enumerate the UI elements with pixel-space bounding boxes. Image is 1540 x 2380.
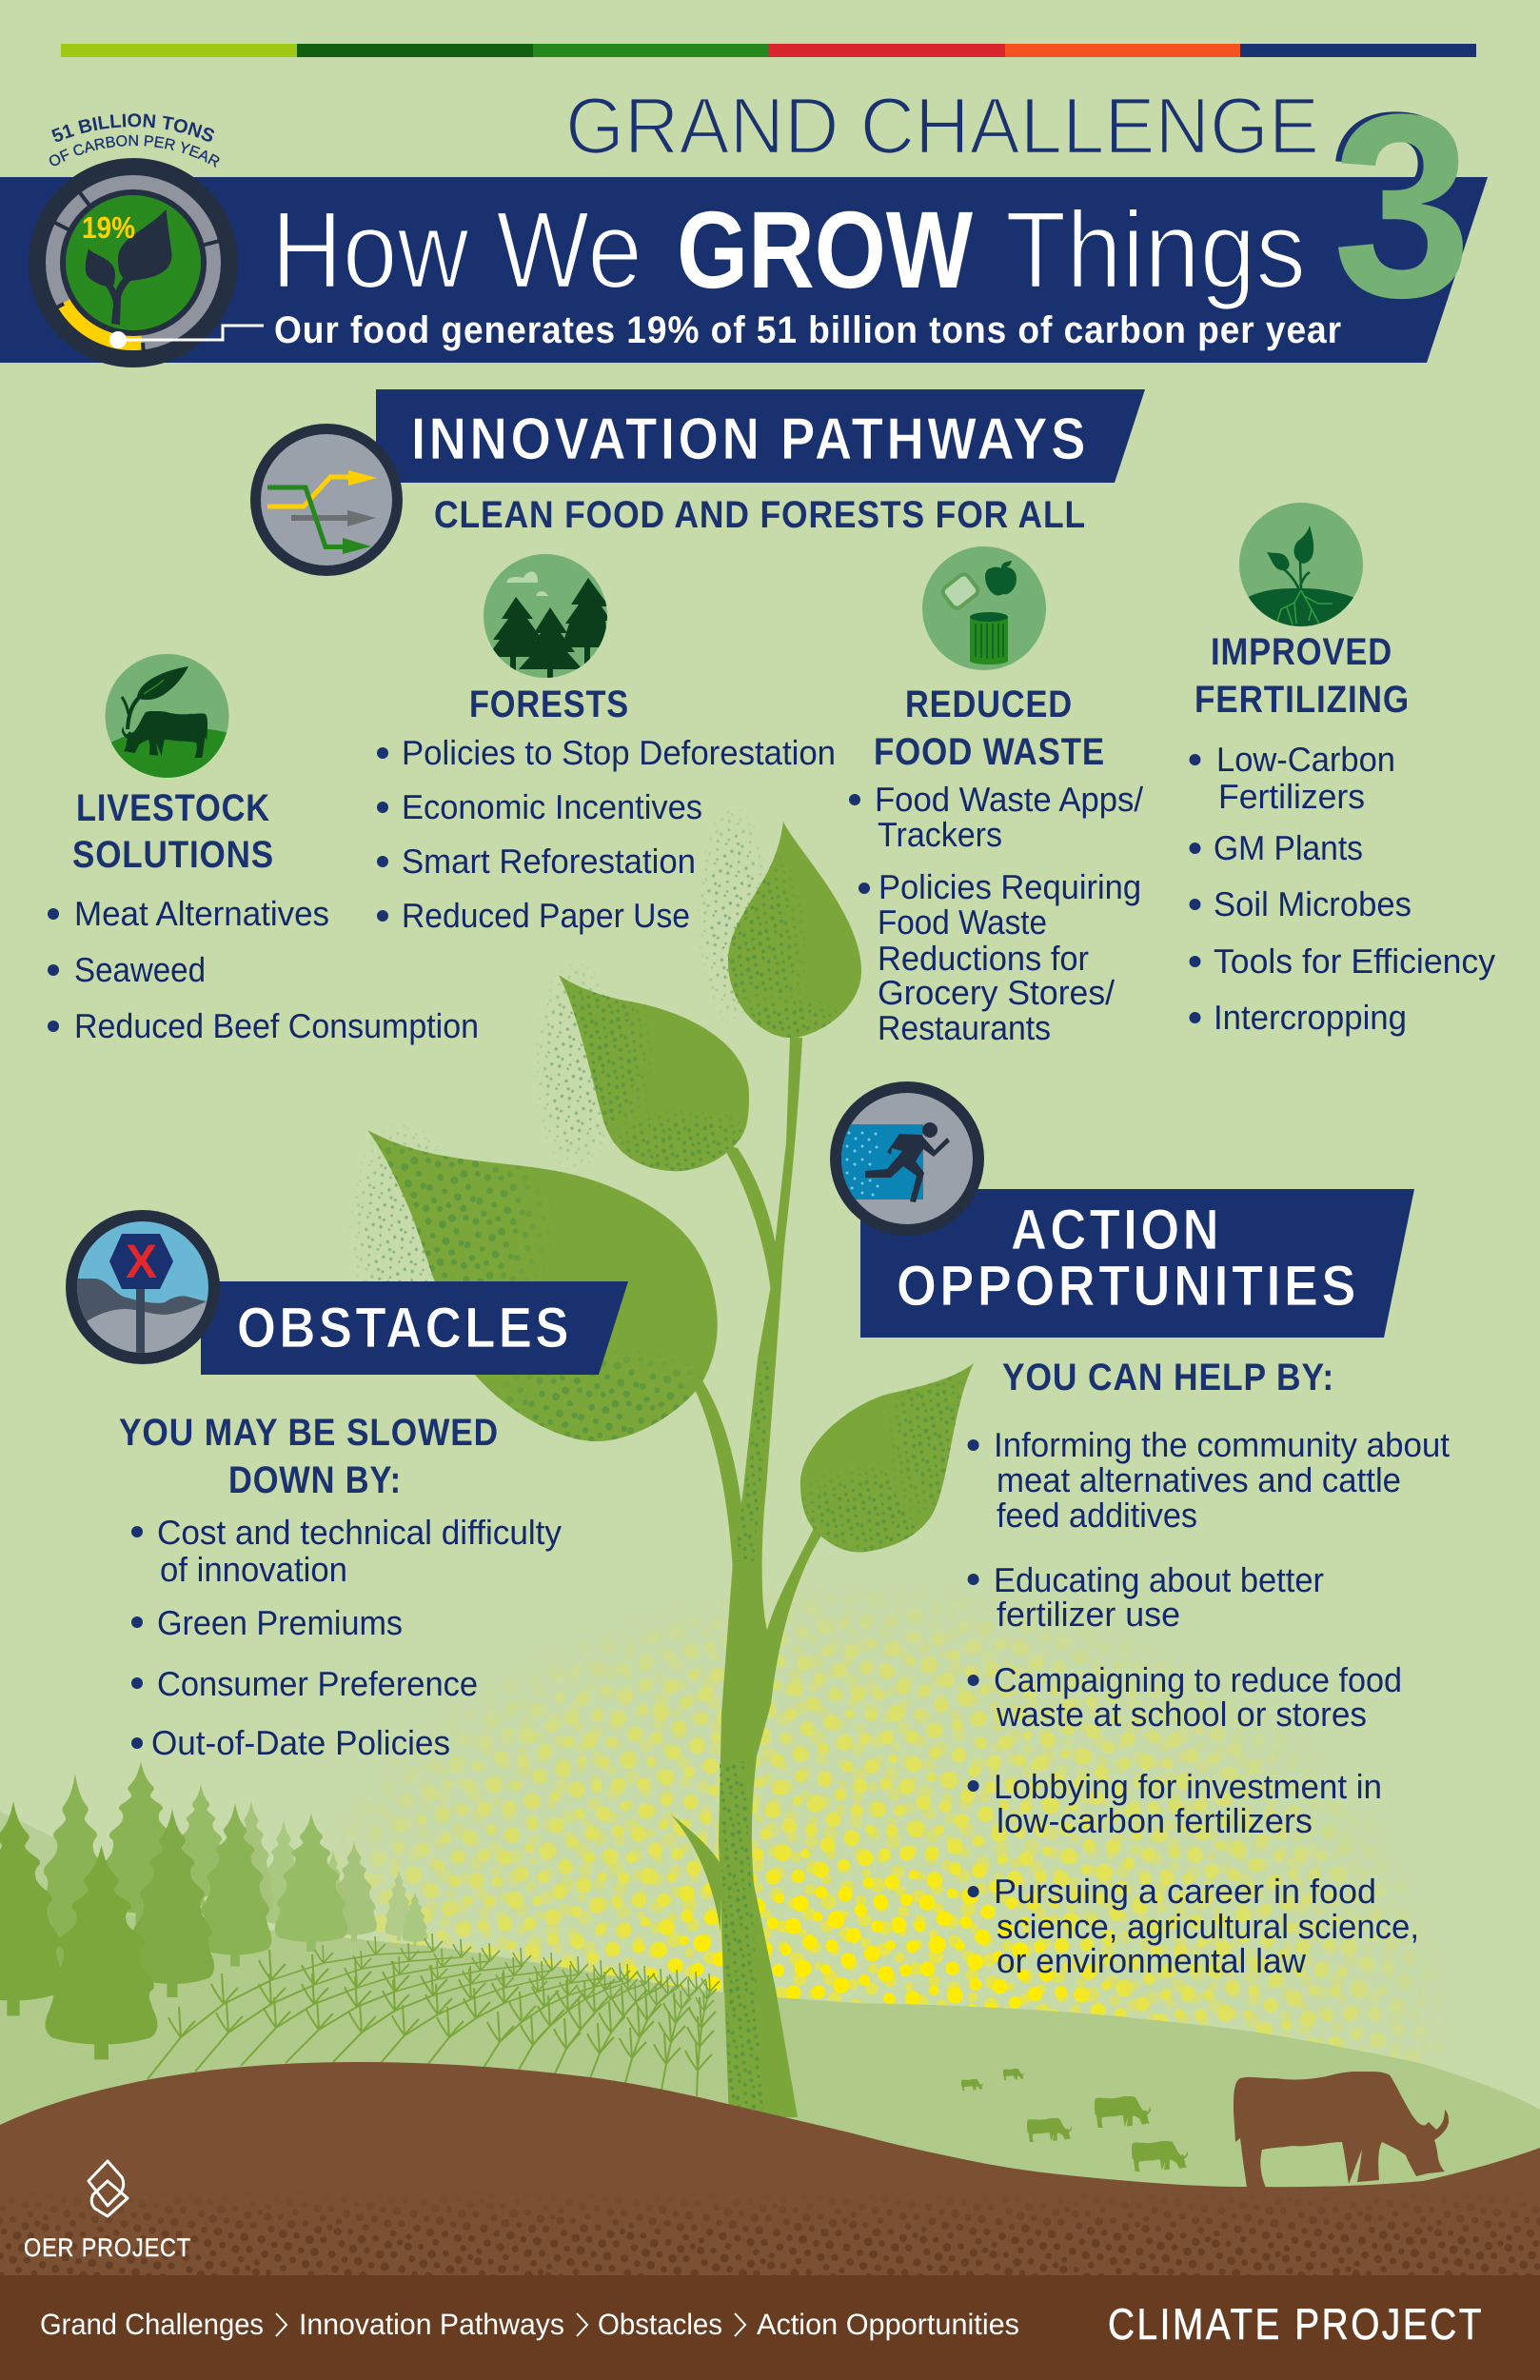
curved gauge caption xyxy=(49,113,219,168)
stem xyxy=(719,1038,823,2117)
icon: cow and leaf xyxy=(105,654,228,778)
obstacles banner xyxy=(201,1281,628,1375)
bullet list: of innovation xyxy=(160,1550,347,1589)
bullet list: science, agricultural science, xyxy=(997,1907,1419,1946)
panel: improved fertilizing: FERTILIZING xyxy=(1194,679,1410,721)
heading: REDUCED xyxy=(905,684,1073,725)
bullet list: or environmental law xyxy=(997,1941,1307,1980)
bullet list xyxy=(968,1425,1450,1980)
bullet list: Out-of-Date Policies xyxy=(151,1723,450,1762)
green disk xyxy=(66,195,201,330)
thin side leaf xyxy=(671,1815,721,1933)
second leaf xyxy=(559,975,749,1171)
bullet list: Pursuing a career in food xyxy=(994,1872,1376,1911)
icon: pathways arrows xyxy=(250,424,403,576)
bullet list: Soil Microbes xyxy=(1214,884,1412,923)
main title xyxy=(271,189,1306,311)
bullet list: waste at school or stores xyxy=(996,1695,1367,1734)
innovation pathways banner: INNOVATION PATHWAYS xyxy=(411,407,1089,472)
logo text: OER PROJECT xyxy=(24,2233,191,2262)
heading: FORESTS xyxy=(469,684,629,725)
footer navigation: Innovation Pathways xyxy=(299,2308,564,2341)
panel: forests xyxy=(377,554,836,935)
main title: Things xyxy=(1005,189,1306,311)
bullet list: Smart Reforestation xyxy=(402,842,696,881)
icon: interlocked diamonds xyxy=(89,2161,128,2216)
bullet list: Reduced Paper Use xyxy=(402,896,690,935)
action banner xyxy=(860,1189,1414,1338)
bullet list: Food Waste Apps/ xyxy=(875,780,1143,819)
plant xyxy=(343,800,990,2123)
icon: food and bin xyxy=(922,546,1046,670)
pathways subtitle: CLEAN FOOD AND FORESTS FOR ALL xyxy=(434,494,1086,536)
main title: How We xyxy=(271,189,642,311)
branch: large leaf xyxy=(693,1380,747,1571)
subtitle: Our food generates 19% of 51 billion tons of carbon per year xyxy=(274,309,1342,351)
bullet list: Reductions for xyxy=(878,939,1089,978)
icon: road sign: X xyxy=(126,1235,157,1288)
background hill xyxy=(0,1812,286,1999)
bullet list: Reduced Beef Consumption xyxy=(74,1006,479,1045)
panel: improved fertilizing xyxy=(1190,503,1495,1037)
innovation pathways banner xyxy=(376,389,1145,483)
bullet list: Food Waste xyxy=(878,902,1047,942)
bullet list: Consumer Preference xyxy=(157,1664,478,1703)
panel: reduced food waste: FOOD WASTE xyxy=(874,731,1105,773)
panel: reduced food waste xyxy=(849,546,1143,1047)
crop rows xyxy=(148,1952,710,2096)
bullet list: Educating about better xyxy=(994,1560,1324,1599)
bullet list: feed additives xyxy=(997,1496,1197,1535)
OER Project logo xyxy=(24,2161,191,2262)
yellow dot field xyxy=(328,1594,1439,2068)
connector line xyxy=(118,326,264,340)
bullet list xyxy=(849,780,1143,1047)
bullet list: Tools for Efficiency xyxy=(1214,942,1495,981)
panel: obstacles: DOWN BY: xyxy=(228,1459,402,1501)
bullet list: meat alternatives and cattle xyxy=(997,1460,1401,1499)
numeral 3: 3 xyxy=(1327,58,1466,349)
panel: livestock solutions xyxy=(48,654,479,1045)
heading: YOU CAN HELP BY: xyxy=(1002,1357,1334,1398)
bullet list: Informing the community about xyxy=(994,1425,1450,1464)
bullet list: Meat Alternatives xyxy=(74,894,329,933)
bullet list xyxy=(1190,740,1495,1037)
bullet list: Restaurants xyxy=(878,1008,1051,1047)
heading: YOU MAY BE SLOWED xyxy=(119,1412,499,1454)
curved gauge caption: OF CARBON PER YEAR xyxy=(49,135,219,168)
curved gauge caption: 51 BILLION TONS xyxy=(51,113,214,142)
forest xyxy=(0,1761,427,2059)
bullet list: Policies Requiring xyxy=(879,867,1141,906)
bullet list: Seaweed xyxy=(74,950,206,989)
bullet list: Lobbying for investment in xyxy=(994,1767,1382,1806)
icon: road sign xyxy=(66,1210,220,1364)
carbon gauge xyxy=(29,158,264,367)
panel: livestock solutions: SOLUTIONS xyxy=(72,834,274,876)
bullet list: Trackers xyxy=(878,815,1002,854)
footer navigation: Grand Challenges xyxy=(40,2308,264,2341)
bullet list xyxy=(131,1513,562,1762)
colour stripe xyxy=(61,44,1476,57)
footer navigation: Action Opportunities xyxy=(757,2308,1019,2341)
stem base speckle xyxy=(725,1990,763,2110)
bullet list: low-carbon fertilizers xyxy=(997,1801,1313,1840)
soil xyxy=(0,2062,1540,2285)
panel: action opportunities xyxy=(830,1081,1450,1980)
bullet list: Low-Carbon xyxy=(1216,740,1395,779)
bullet list: fertilizer use xyxy=(997,1595,1180,1634)
action banner: OPPORTUNITIES xyxy=(897,1254,1359,1318)
bullet list: Policies to Stop Deforestation xyxy=(402,733,836,772)
action banner: ACTION xyxy=(1011,1198,1222,1261)
main title: GROW xyxy=(677,189,973,311)
bullet list: Grocery Stores/ xyxy=(878,973,1115,1012)
icon: plant xyxy=(86,209,172,325)
bullet list: Green Premiums xyxy=(157,1603,403,1642)
bullet list: Cost and technical difficulty xyxy=(157,1513,562,1552)
gauge percentage: 19% xyxy=(82,210,135,245)
footer navigation: Obstacles xyxy=(598,2308,722,2341)
grazing cow xyxy=(1234,2072,1449,2188)
numeral 3: 3 xyxy=(1333,60,1471,351)
bullet list xyxy=(48,894,479,1045)
panel: obstacles xyxy=(66,1210,628,1762)
title banner xyxy=(0,177,1488,363)
title: grand challenge: GRAND CHALLENGE xyxy=(565,81,1319,170)
right leaf xyxy=(800,1363,974,1552)
bullet list: Economic Incentives xyxy=(402,787,702,826)
heading: IMPROVED xyxy=(1211,631,1392,673)
stem base over field xyxy=(724,1990,798,2117)
icon: seedling and roots xyxy=(1239,503,1363,626)
branch: second leaf xyxy=(727,1145,781,1293)
bullet list: GM Plants xyxy=(1214,828,1363,867)
field xyxy=(0,1904,1540,2190)
small grazing cows xyxy=(961,2069,1188,2172)
footer band xyxy=(0,2275,1540,2380)
bullet list: Intercropping xyxy=(1214,998,1407,1037)
stem speckle xyxy=(720,1361,769,1985)
top leaf xyxy=(728,822,861,1038)
icon: running figure xyxy=(830,1081,984,1236)
obstacles banner: OBSTACLES xyxy=(237,1296,572,1359)
leaf overspray dots xyxy=(350,809,762,1281)
large leaf xyxy=(367,1130,718,1441)
bullet list xyxy=(377,733,836,935)
icon: pine trees xyxy=(484,554,611,678)
bullet list: Fertilizers xyxy=(1218,777,1365,816)
bullet list: Campaigning to reduce food xyxy=(994,1660,1402,1699)
footer navigation xyxy=(40,2308,1019,2341)
heading: LIVESTOCK xyxy=(76,787,270,829)
soil speckle xyxy=(0,2207,1540,2275)
